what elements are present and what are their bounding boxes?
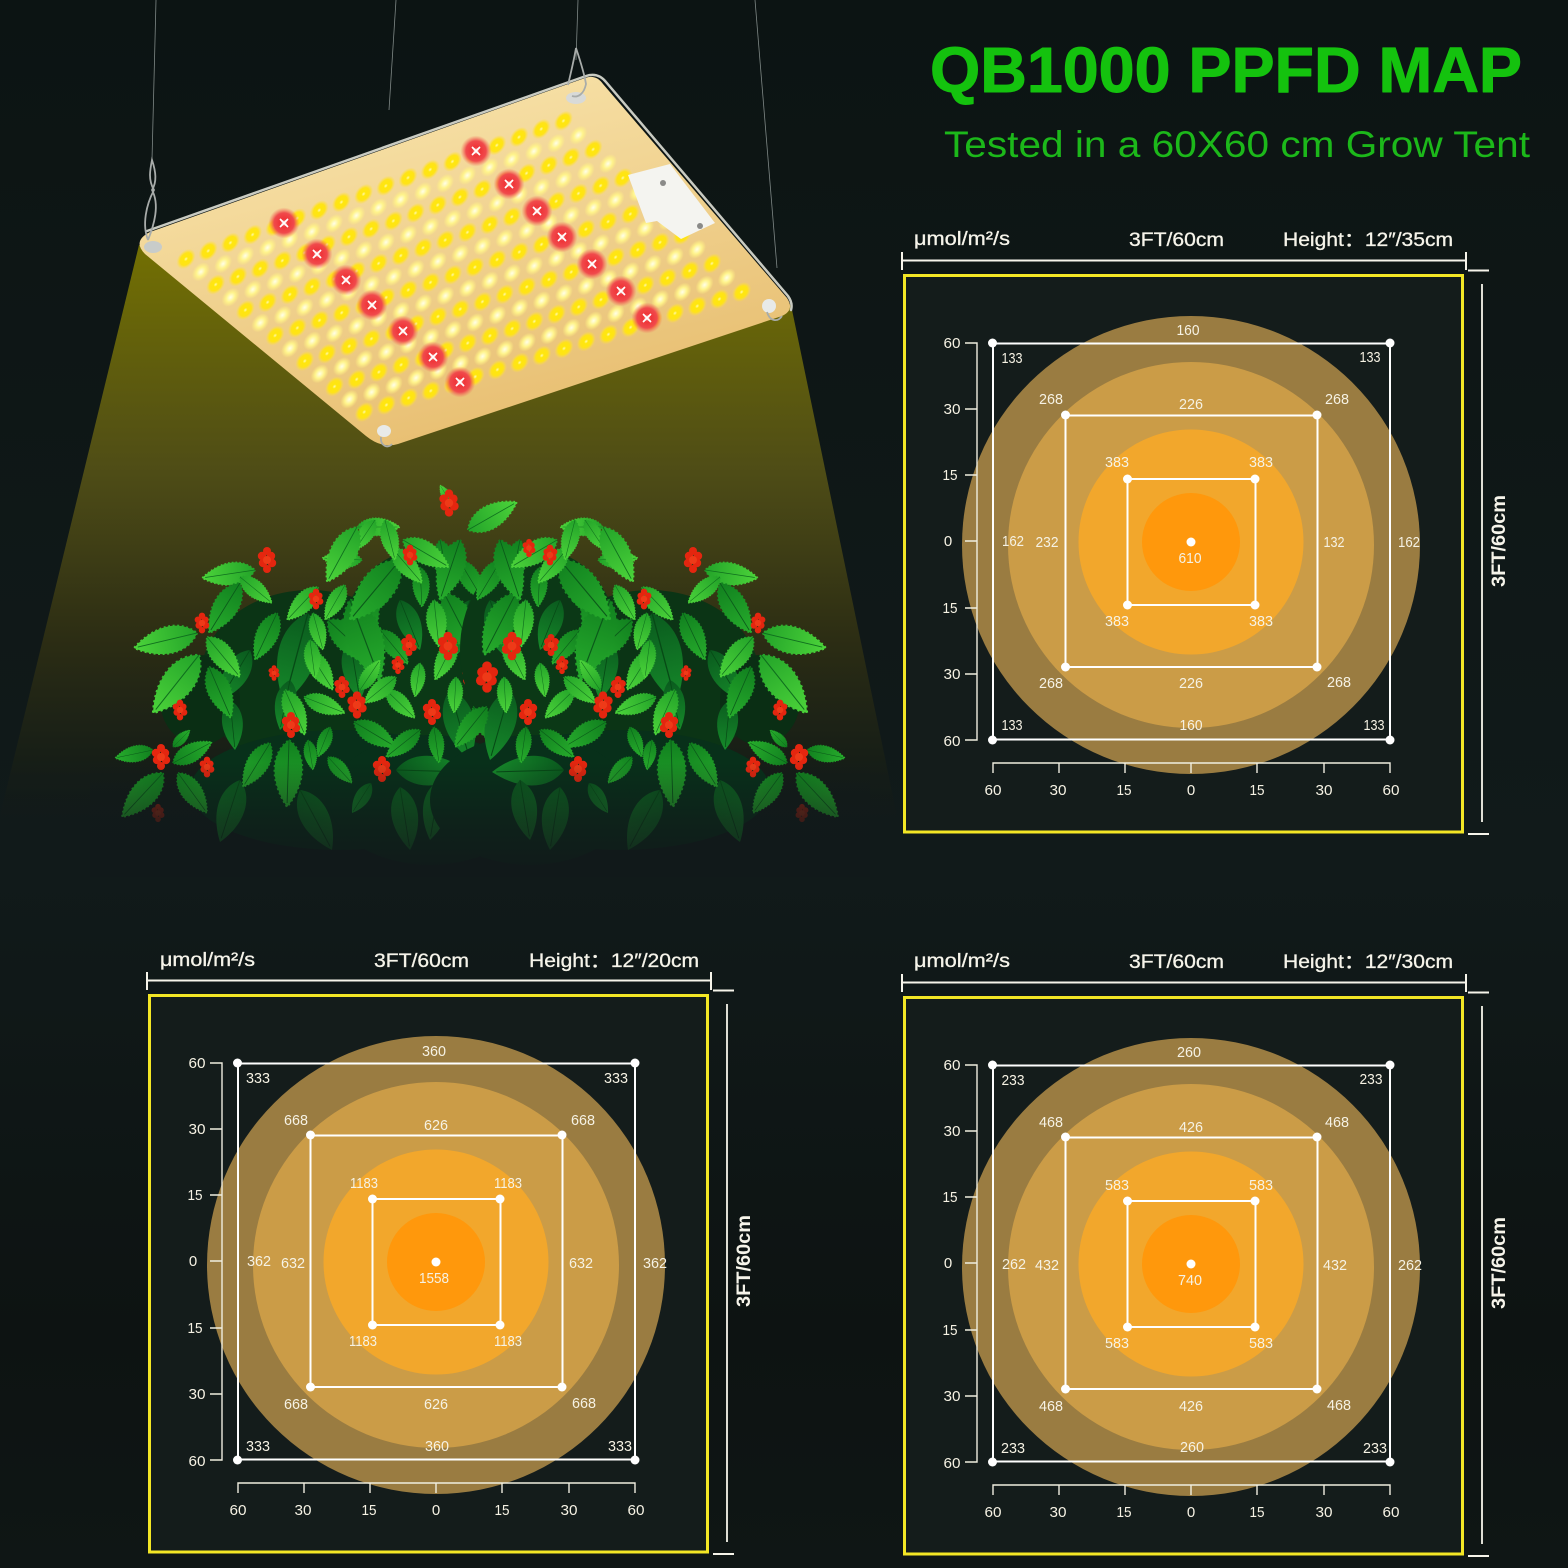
LED grid: [176, 108, 751, 425]
values 20cm: 333: [604, 1070, 628, 1087]
hanging wires: [152, 0, 777, 268]
values 30cm: 432: [1323, 1257, 1347, 1274]
values 35cm: 162: [1398, 534, 1420, 551]
values 30cm: 426: [1179, 1398, 1203, 1415]
values 35cm: 610: [1178, 550, 1202, 567]
values 20cm: 333: [246, 1438, 270, 1455]
values 35cm: 133: [1364, 717, 1384, 734]
values 30cm: 262: [1002, 1256, 1026, 1273]
chart 35cm: [902, 252, 1510, 834]
values 20cm: 360: [422, 1043, 446, 1060]
header 20cm: Height：12″/20cm: [529, 951, 699, 972]
light cone: [0, 245, 902, 840]
values 20cm: 632: [281, 1255, 305, 1272]
values 35cm: 383: [1105, 613, 1129, 630]
header 30cm: 3FT/60cm: [1129, 952, 1224, 973]
values 30cm: 426: [1179, 1119, 1203, 1136]
values 20cm: 626: [424, 1117, 448, 1134]
header 35cm: [914, 229, 1453, 251]
values 20cm: 360: [425, 1438, 449, 1455]
values 35cm: 268: [1039, 391, 1063, 408]
values 35cm: 383: [1105, 454, 1129, 471]
values 35cm: 162: [1002, 533, 1024, 550]
hooks: [144, 48, 782, 446]
header 30cm: μmol/m²/s: [914, 951, 1010, 972]
plant: [90, 483, 870, 877]
values 30cm: 583: [1249, 1177, 1273, 1194]
values 20cm: 1183: [494, 1333, 522, 1350]
values 35cm: 132: [1324, 534, 1344, 551]
values 30cm: 583: [1105, 1335, 1129, 1352]
values 20cm: [246, 1043, 667, 1455]
panel: height 35cm map: [902, 229, 1510, 834]
values 30cm: 583: [1105, 1177, 1129, 1194]
values 35cm: 133: [1002, 350, 1022, 367]
chart 30cm: [902, 974, 1510, 1556]
values 30cm: 583: [1249, 1335, 1273, 1352]
values 30cm: 260: [1180, 1439, 1204, 1456]
header 20cm: μmol/m²/s: [160, 950, 255, 971]
values 30cm: 468: [1039, 1114, 1063, 1131]
values 30cm: 260: [1177, 1044, 1201, 1061]
values 30cm: 468: [1325, 1114, 1349, 1131]
values 30cm: 233: [1001, 1440, 1025, 1457]
header 20cm: [160, 950, 699, 972]
chart 20cm: [147, 972, 755, 1554]
header 30cm: [914, 951, 1453, 973]
panel: height 20cm map: [147, 950, 755, 1554]
values 20cm: 362: [247, 1253, 271, 1270]
values 30cm: 740: [1178, 1272, 1202, 1289]
values 20cm: 668: [284, 1112, 308, 1129]
values 35cm: 133: [1002, 717, 1022, 734]
values 30cm: 262: [1398, 1257, 1422, 1274]
values 30cm: 233: [1360, 1071, 1382, 1088]
values 20cm: 668: [284, 1396, 308, 1413]
values 30cm: [1001, 1044, 1422, 1457]
values 20cm: 632: [569, 1255, 593, 1272]
values 20cm: 1183: [349, 1333, 377, 1350]
values 20cm: 668: [571, 1112, 595, 1129]
values 35cm: [1002, 322, 1420, 734]
values 35cm: 268: [1325, 391, 1349, 408]
subtitle: Tested in a 60X60 cm Grow Tent: [944, 124, 1531, 165]
values 20cm: 1183: [350, 1175, 378, 1192]
values 20cm: 668: [572, 1395, 596, 1412]
values 30cm: 233: [1363, 1440, 1387, 1457]
values 20cm: 1558: [419, 1270, 449, 1287]
header 20cm: 3FT/60cm: [374, 951, 469, 972]
values 35cm: 268: [1327, 674, 1351, 691]
values 20cm: 362: [643, 1255, 667, 1272]
values 20cm: 333: [246, 1070, 270, 1087]
values 30cm: 233: [1002, 1072, 1024, 1089]
header 35cm: 3FT/60cm: [1129, 230, 1224, 251]
values 30cm: 468: [1039, 1398, 1063, 1415]
values 30cm: 468: [1327, 1397, 1351, 1414]
values 35cm: 383: [1249, 613, 1273, 630]
values 35cm: 226: [1179, 675, 1203, 692]
power box: [628, 164, 715, 239]
panel: height 30cm map: [902, 951, 1510, 1556]
light panel: [140, 48, 792, 446]
red LEDs: [268, 136, 662, 398]
values 20cm: 626: [424, 1396, 448, 1413]
title: QB1000 PPFD MAP: [930, 34, 1522, 106]
header 30cm: Height：12″/30cm: [1283, 952, 1453, 973]
header 35cm: Height：12″/35cm: [1283, 230, 1453, 251]
values 35cm: 383: [1249, 454, 1273, 471]
values 35cm: 268: [1039, 675, 1063, 692]
values 35cm: 232: [1036, 534, 1058, 551]
values 20cm: 1183: [494, 1175, 522, 1192]
values 35cm: 226: [1179, 396, 1203, 413]
values 30cm: 432: [1035, 1257, 1059, 1274]
values 35cm: 133: [1360, 349, 1380, 366]
values 35cm: 160: [1176, 322, 1200, 339]
values 35cm: 160: [1180, 717, 1202, 734]
values 20cm: 333: [608, 1438, 632, 1455]
header 35cm: μmol/m²/s: [914, 229, 1010, 250]
